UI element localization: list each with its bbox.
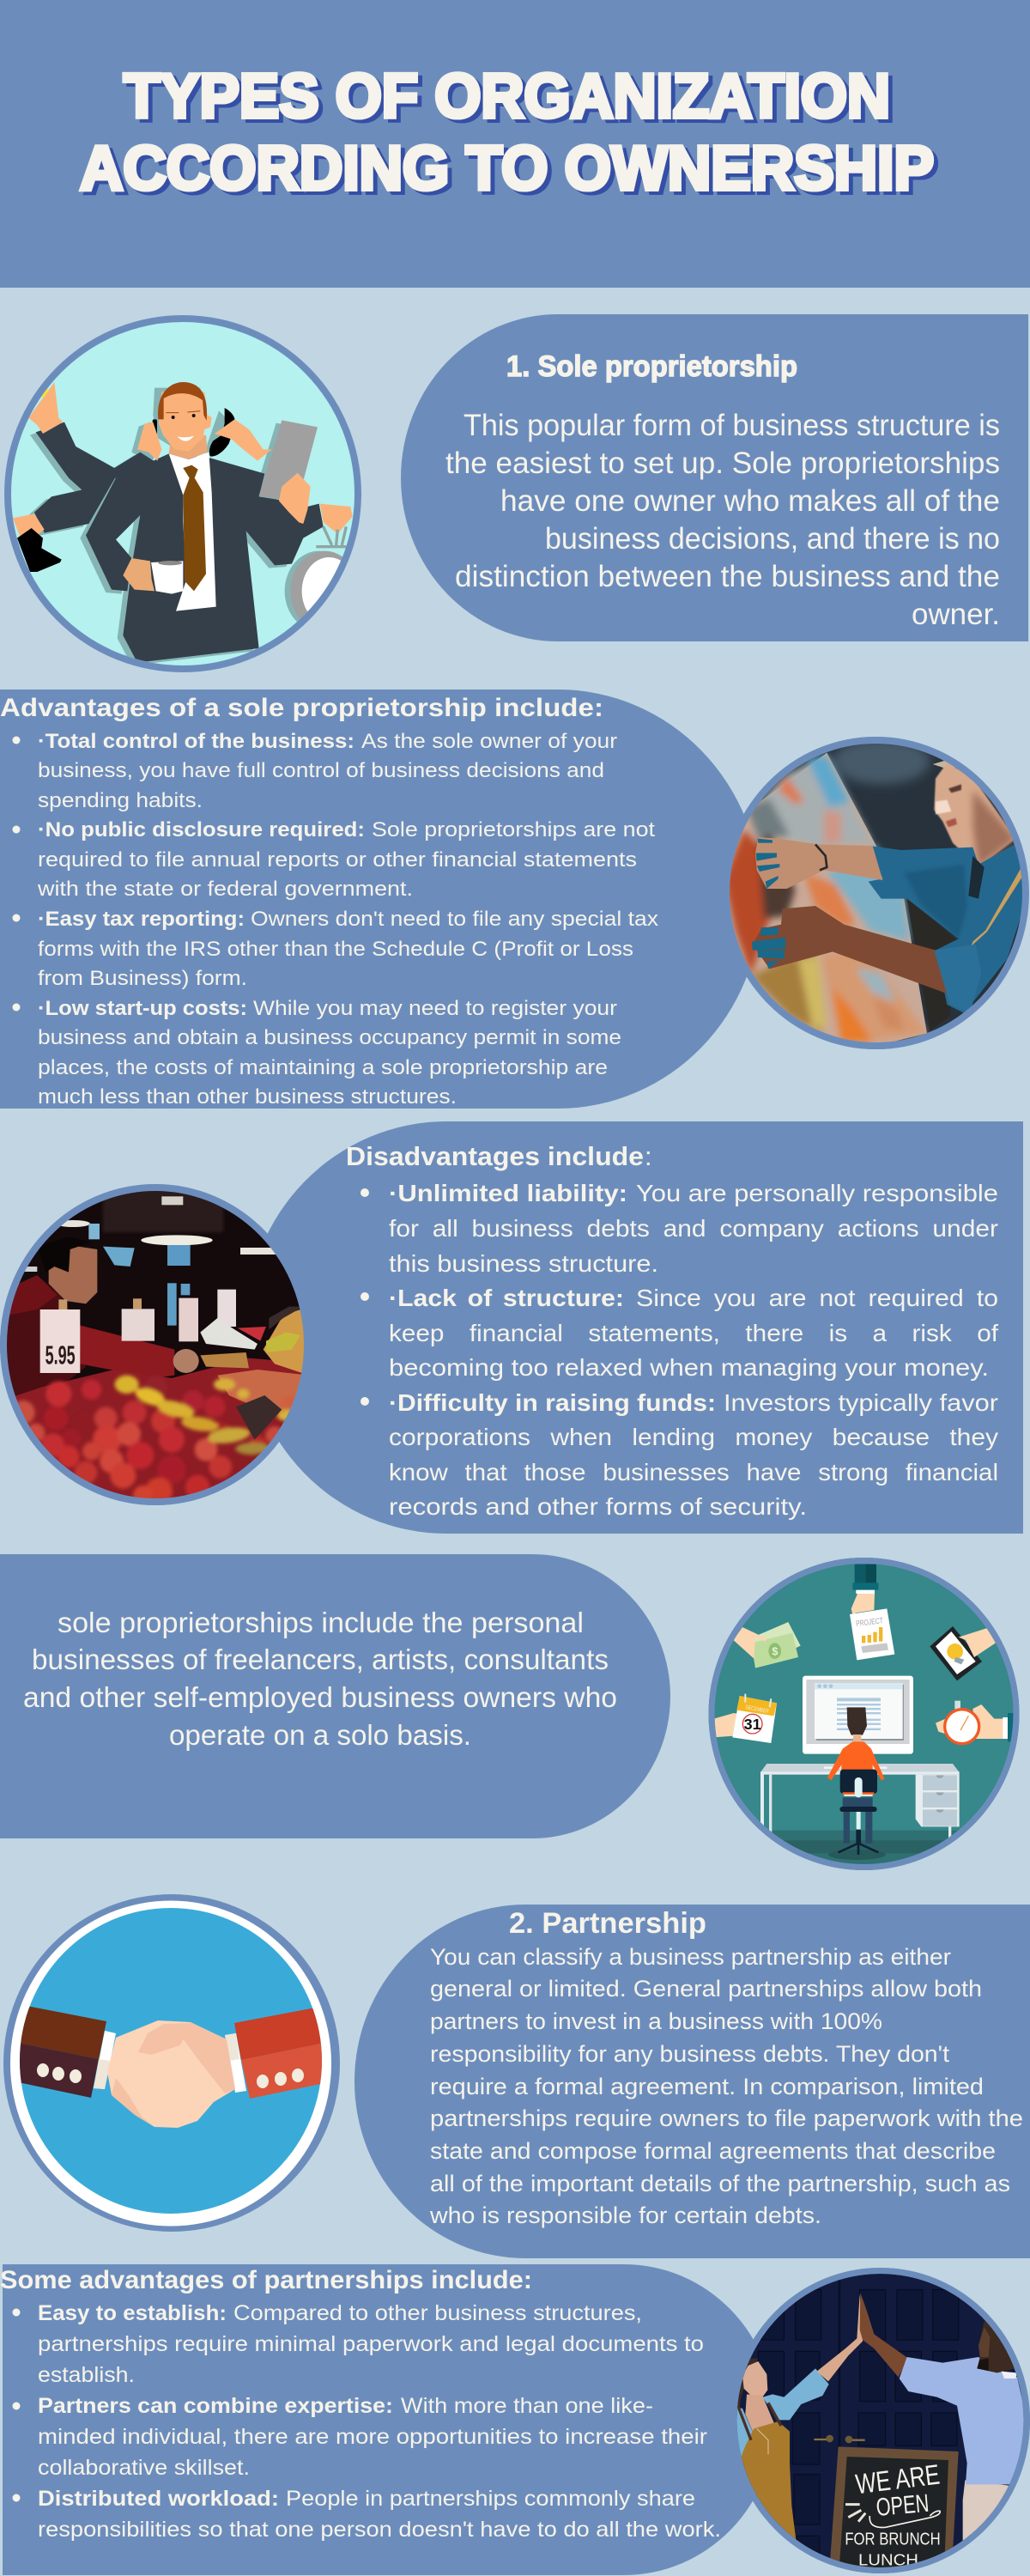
sleeve buttons [37, 2063, 304, 2088]
list: partnership advantages: Easy to establish: [38, 2301, 227, 2325]
chalkboard sign: FOR BRUNCH [845, 2530, 941, 2549]
canvas colours [724, 754, 927, 1045]
apron strap [972, 867, 1023, 946]
lower right hand [320, 504, 353, 534]
man arm [860, 2293, 908, 2377]
text block: partnership definition: state and compose formal agreements that describe [430, 2138, 996, 2164]
paper [259, 420, 318, 500]
vendor body [7, 1275, 86, 1396]
text block: sole proprietorship definition: distinction between the business and the [455, 560, 1000, 593]
panel: sole proprietorship intro [401, 314, 1028, 641]
list: disadvantages: corporations when lending money because they [389, 1424, 998, 1450]
list: advantages: spending habits. [38, 789, 203, 812]
panel: advantages of partnerships [0, 2264, 775, 2575]
upper hand and arm [755, 837, 882, 889]
list: partnership advantages: Compared to other business structures, [233, 2301, 642, 2325]
text block: examples: sole proprietorships include the personal [58, 1607, 584, 1638]
chalkboard sign [830, 2446, 959, 2572]
text block: examples: operate on a solo basis. [169, 1719, 471, 1751]
right sleeve [234, 2006, 324, 2060]
price signs [40, 1309, 80, 1373]
list: advantages: much less than other business structures. [38, 1085, 457, 1109]
heading: 1. Sole proprietorship: 1. Sole proprietorship [506, 350, 797, 383]
list: advantages: places, the costs of maintaining a sole proprietorship are [38, 1056, 608, 1079]
hand holding mug [123, 558, 154, 591]
list: partnership advantages [12, 2301, 721, 2542]
text block: sole proprietorship definition: owner. [912, 598, 1000, 631]
raised arm [36, 422, 156, 491]
text block: sole proprietorship definition: This popular form of business structure is [464, 409, 1000, 442]
desk [760, 1764, 960, 1772]
list: advantages: ·Easy tax reporting: [38, 908, 245, 931]
text block: partnership definition: You can classify a business partnership as either [430, 1944, 951, 1970]
list: partnership advantages: People in partnerships commonly share [286, 2487, 695, 2511]
text block: partnership definition [429, 1944, 1023, 2228]
right phone [209, 408, 235, 457]
hand [173, 1349, 199, 1373]
list: disadvantages: Investors typically favor [724, 1389, 998, 1416]
panel: partnership [354, 1905, 1030, 2258]
second left arm [34, 477, 116, 533]
neck [169, 435, 208, 459]
text block: sole proprietorship definition [445, 409, 1000, 631]
hand with calendar [714, 1713, 742, 1737]
list: advantages: Owners don't need to file any special tax [251, 908, 658, 931]
floor [704, 1831, 1026, 1876]
list: partnership advantages: With more than one like- [401, 2394, 653, 2418]
shirt [869, 841, 1026, 1013]
icon: freelancer at desk surrounded by hands: 31 [744, 1716, 761, 1733]
suit body [86, 453, 169, 591]
blue windows [167, 1245, 191, 1266]
man head [977, 2321, 1015, 2372]
person: neck and torso [853, 1735, 861, 1742]
list: advantages: from Business) form. [38, 967, 247, 990]
photo: partners high-fiving at shop door [725, 2263, 1030, 2576]
list: disadvantages: keep financial statements, there is a risk of [389, 1320, 998, 1346]
left sleeve [18, 2002, 106, 2059]
icon: handshake [3, 1894, 340, 2232]
chalkboard sign: WE ARE [854, 2458, 942, 2500]
text block: partnership definition: responsibility for any business debts. They don't [430, 2041, 950, 2067]
apron [738, 2421, 797, 2542]
heading: 2. Partnership: 2. Partnership [509, 1907, 706, 1940]
list: disadvantages: ·Lack of structure: [389, 1285, 624, 1311]
hand with money [749, 1622, 801, 1662]
list: partnership advantages: Partners can combine expertise: [38, 2394, 393, 2418]
photo: fruit market vendor [0, 1181, 318, 1513]
head [159, 386, 212, 452]
text block: partnership definition: partners to invest in a business with 100% [430, 2008, 882, 2034]
woman hair [731, 2359, 758, 2409]
text block: partnership definition: all of the important details of the partnership, such as [430, 2171, 1010, 2196]
door handles [814, 2436, 865, 2443]
canvas [721, 753, 927, 1056]
person: seat and pants [840, 1770, 877, 1794]
list: advantages: ·No public disclosure required: [38, 818, 365, 841]
cuffs [94, 2031, 116, 2089]
woman neck [745, 2394, 774, 2434]
heading: disadvantages: : [645, 1141, 652, 1171]
apron straps [736, 2403, 781, 2440]
text block: partnership definition: partnerships require owners to file paperwork with the [430, 2105, 1023, 2131]
alarm clock [316, 526, 346, 547]
man apron [963, 2480, 1011, 2542]
black phone [17, 528, 62, 572]
header band [0, 0, 1030, 288]
hand with stopwatch [972, 1704, 1007, 1739]
shirt [169, 453, 216, 611]
list: disadvantages: records and other forms of security. [389, 1493, 807, 1520]
text block: sole proprietorship definition: business decisions, and there is no [545, 522, 1000, 556]
list: partnership advantages: collaborative skillset. [38, 2456, 250, 2480]
list: disadvantages: ·Unlimited liability: [389, 1180, 627, 1206]
list: advantages: business and obtain a business occupancy permit in some [38, 1026, 621, 1049]
text block: examples: businesses of freelancers, artists, consultants [32, 1643, 609, 1675]
door panels [758, 2290, 959, 2555]
woman arm [817, 2294, 863, 2381]
hair [158, 382, 207, 421]
chalkboard sign: LUNCH [858, 2551, 918, 2569]
hand with tablet [930, 1626, 982, 1680]
list: partnership advantages: responsibilities so that one person doesn't have to do all the work. [38, 2518, 721, 2542]
title: TYPES OF ORGANIZATION [124, 62, 890, 131]
list: advantages: required to file annual reports or other financial statements [38, 848, 637, 872]
list: advantages: ·Low start-up costs: [38, 997, 247, 1020]
panel: advantages of a sole proprietorship [0, 690, 761, 1109]
text block: examples [23, 1607, 617, 1751]
man shirt [900, 2357, 1030, 2484]
list: disadvantages: You are personally responsible [636, 1180, 998, 1206]
list: advantages: As the sole owner of your [361, 730, 617, 753]
person: hair [847, 1707, 867, 1735]
lower arm and hand [753, 906, 950, 994]
list: disadvantages: Since you are not required to [636, 1285, 998, 1311]
list: advantages [12, 730, 658, 1109]
heading: advantages: Advantages of a sole proprietorship include: [0, 694, 603, 722]
woman face [934, 762, 1015, 867]
list: advantages: forms with the IRS other than the Schedule C (Profit or Loss [38, 938, 633, 961]
list: disadvantages [360, 1180, 998, 1520]
ceiling lights [141, 1235, 213, 1245]
chalkboard sign: OPEN [875, 2489, 930, 2522]
shadow silhouette [29, 388, 287, 663]
yellow fruit [115, 1376, 139, 1394]
dark area below the sleeve [907, 899, 959, 1030]
list: advantages: While you may need to register your [253, 997, 617, 1020]
photo: artist painting a canvas [721, 730, 1030, 1056]
title: ACCORDING TO OWNERSHIP [80, 134, 934, 203]
list: advantages: ·Total control of the business: [38, 730, 354, 753]
raised hand [28, 382, 63, 434]
dark wall [760, 744, 1020, 1041]
list: disadvantages: becoming too relaxed when managing your money. [389, 1354, 989, 1381]
hand with project report [855, 1564, 865, 1583]
text block: examples: and other self-employed business owners who [23, 1681, 617, 1713]
list: disadvantages: ·Difficulty in raising funds: [389, 1389, 716, 1416]
chair [855, 1777, 863, 1797]
left hand with phone [153, 419, 157, 434]
vendor head [49, 1245, 97, 1303]
clasped hands [107, 2020, 235, 2128]
eyes [172, 416, 175, 419]
apples [11, 1376, 298, 1505]
list: disadvantages: for all business debts and company actions under [389, 1215, 998, 1242]
icon: freelancer at desk surrounded by hands [704, 1558, 1026, 1876]
woman face [742, 2361, 767, 2397]
smile [178, 436, 194, 441]
drawers [916, 1775, 960, 1826]
list: disadvantages: this business structure. [389, 1250, 658, 1277]
text block: partnership definition: who is responsible for certain debts. [429, 2202, 821, 2228]
title [80, 62, 934, 203]
hand on paper [279, 473, 311, 524]
heading: partnership advantages: Some advantages of partnerships include: [0, 2266, 532, 2294]
vendor arm [80, 1325, 174, 1378]
list: advantages: business, you have full control of business decisions and [38, 759, 604, 782]
produce base [0, 1358, 318, 1513]
list: partnership advantages: minded individual, there are more opportunities to increase their [38, 2425, 707, 2449]
text block: partnership definition: general or limited. General partnerships allow both [430, 1976, 982, 2002]
list: partnership advantages: partnerships require minimal paperwork and legal documents to [38, 2332, 704, 2356]
rolled sleeve [934, 945, 981, 1013]
photo: fruit market vendor: 5.95 [45, 1340, 76, 1370]
list: disadvantages: know that those businesses have strong financial [389, 1459, 998, 1485]
mug [151, 561, 183, 594]
icon: freelancer at desk surrounded by hands: $ [772, 1645, 778, 1657]
lower left hand [13, 513, 45, 537]
list: advantages: with the state or federal government. [37, 878, 413, 901]
icon: businessman with many arms [4, 315, 361, 672]
right fruit [264, 1307, 312, 1376]
text block: partnership definition: require a formal agreement. In comparison, limited [430, 2074, 984, 2099]
list: partnership advantages: Distributed workload: [38, 2487, 279, 2511]
woman hair [932, 761, 954, 768]
panel: disadvantages [245, 1121, 1023, 1534]
monitor [803, 1676, 913, 1754]
icon: freelancer at desk surrounded by hands: PROJECT [856, 1616, 884, 1628]
list: advantages: Sole proprietorships are not [372, 818, 655, 841]
tie [183, 465, 206, 591]
slate card [236, 1395, 282, 1440]
heading: disadvantages: Disadvantages include [346, 1141, 644, 1171]
text block: sole proprietorship definition: the easiest to set up. Sole proprietorships [445, 447, 1000, 480]
icon: freelancer at desk surrounded by hands: DECEMBER [745, 1704, 769, 1715]
right hand [215, 419, 272, 461]
panel: sole proprietorship examples [0, 1554, 670, 1838]
woman shirt [730, 2406, 753, 2463]
text block: sole proprietorship definition: have one owner who makes all of the [500, 484, 1000, 518]
white bags [200, 1318, 258, 1350]
list: partnership advantages: establish. [38, 2363, 135, 2387]
